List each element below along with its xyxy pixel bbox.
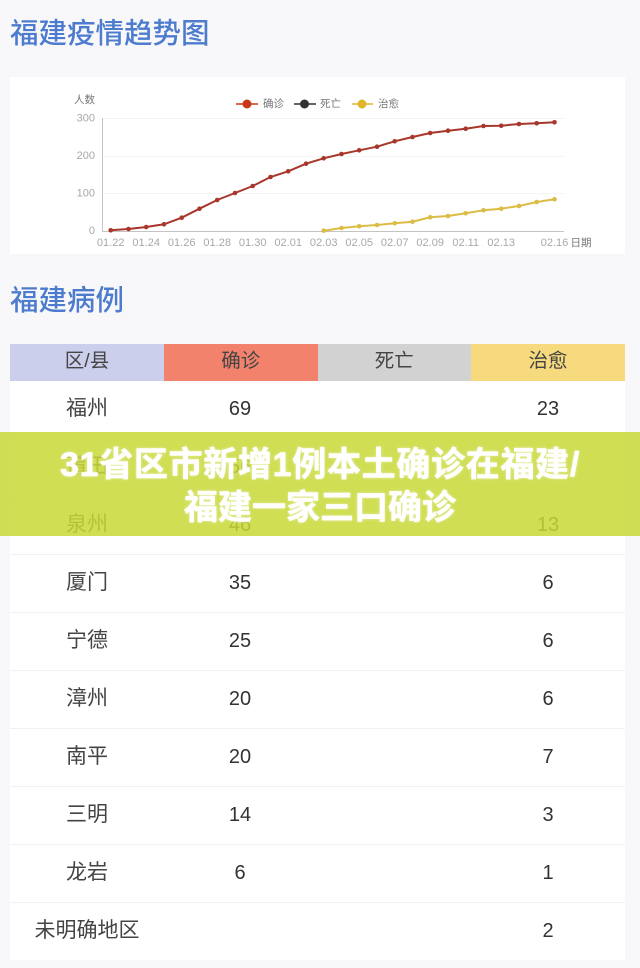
row: Nanping: 20 xyxy=(229,746,251,768)
x axis labels: 02.09 xyxy=(416,237,444,249)
y axis labels: 人数 xyxy=(74,93,95,106)
table header: recovered xyxy=(471,344,625,381)
x axis labels: 日期 xyxy=(570,237,592,249)
row: Putian: 56 xyxy=(229,456,251,478)
row: Sanming: 三明 xyxy=(66,803,108,826)
y axis labels: 300 xyxy=(77,112,95,124)
row: Zhangzhou: 漳州 xyxy=(66,687,108,710)
row: Longyan: 6 xyxy=(234,862,246,884)
row: Longyan xyxy=(10,845,625,903)
panel: line chart xyxy=(10,77,625,254)
x axis labels: 02.13 xyxy=(487,237,515,249)
table header: deaths: 死亡 xyxy=(375,350,414,372)
row: Ningde: 宁德 xyxy=(66,629,108,652)
row: Longyan: 龙岩 xyxy=(66,861,108,884)
row: Quanzhou: 泉州 xyxy=(66,513,108,536)
line chart xyxy=(74,93,592,249)
row: Unspecified area: 2 xyxy=(542,920,554,942)
legend: 死亡 xyxy=(320,97,341,110)
table header: district xyxy=(10,344,164,381)
headline text: 31省区市新增1例本土确诊在福建/ xyxy=(60,446,580,484)
row: Quanzhou: 46 xyxy=(229,514,251,536)
y axis labels: 0 xyxy=(89,225,95,237)
row: Zhangzhou: 6 xyxy=(542,688,554,710)
x axis labels: 01.30 xyxy=(239,237,266,249)
row: Putian xyxy=(10,439,625,497)
row: Quanzhou xyxy=(10,497,625,555)
row: Zhangzhou xyxy=(10,671,625,729)
y axis labels: 100 xyxy=(77,188,95,200)
headline banner xyxy=(0,432,640,536)
x axis labels: 02.07 xyxy=(381,237,408,249)
row: Sanming: 3 xyxy=(542,804,554,826)
headline text xyxy=(60,445,580,527)
row: Putian: 莆田 xyxy=(66,455,108,478)
row: Ningde xyxy=(10,613,625,671)
row: Nanping xyxy=(10,729,625,787)
row: Longyan: 1 xyxy=(542,862,554,884)
legend: 治愈 xyxy=(378,97,399,110)
legend xyxy=(236,97,399,110)
row: Fuzhou: 福州 xyxy=(66,397,108,420)
panel: case table xyxy=(10,344,625,960)
row: Sanming xyxy=(10,787,625,845)
row: Zhangzhou: 20 xyxy=(229,688,251,710)
legend: 确诊 xyxy=(263,97,284,110)
table header: district: 区/县 xyxy=(65,350,109,372)
row: Unspecified area: 未明确地区 xyxy=(34,919,140,942)
row: Ningde: 25 xyxy=(229,630,251,652)
row: Fuzhou xyxy=(10,381,625,439)
y axis labels: 200 xyxy=(77,150,95,162)
recovered line xyxy=(321,197,557,233)
row: Nanping: 南平 xyxy=(66,745,108,768)
x axis labels: 02.01 xyxy=(274,237,302,249)
x axis labels: 01.24 xyxy=(132,237,160,249)
row: Fuzhou: 23 xyxy=(537,398,559,420)
x axis labels: 01.22 xyxy=(97,237,124,249)
headline text: 福建一家三口确诊 xyxy=(184,489,456,527)
heading: Fujian epidemic trend: 福建疫情趋势图 xyxy=(10,18,210,50)
row: Sanming: 14 xyxy=(229,804,251,826)
row: Fuzhou: 69 xyxy=(229,398,251,420)
x axis labels: 01.26 xyxy=(168,237,195,249)
x axis labels: 02.03 xyxy=(310,237,337,249)
row: Nanping: 7 xyxy=(542,746,554,768)
table header: recovered: 治愈 xyxy=(528,350,568,372)
x axis labels: 01.28 xyxy=(203,237,231,249)
row: Xiamen: 厦门 xyxy=(66,571,108,594)
row: Xiamen: 6 xyxy=(542,572,554,594)
x axis labels: 02.16 xyxy=(541,237,568,249)
confirmed line xyxy=(108,120,557,233)
table header: deaths xyxy=(318,344,471,381)
row: Ningde: 6 xyxy=(542,630,554,652)
x axis labels xyxy=(97,237,591,249)
table header: confirmed: 确诊 xyxy=(221,350,260,372)
heading: Fujian cases: 福建病例 xyxy=(10,285,124,317)
y axis labels xyxy=(74,93,95,237)
table header: confirmed xyxy=(164,344,318,381)
row: Xiamen xyxy=(10,555,625,613)
row: Xiamen: 35 xyxy=(229,572,251,594)
x axis labels: 02.11 xyxy=(452,237,479,249)
x axis labels: 02.05 xyxy=(345,237,373,249)
row: Quanzhou: 13 xyxy=(537,514,559,536)
row: Unspecified area xyxy=(34,919,554,942)
